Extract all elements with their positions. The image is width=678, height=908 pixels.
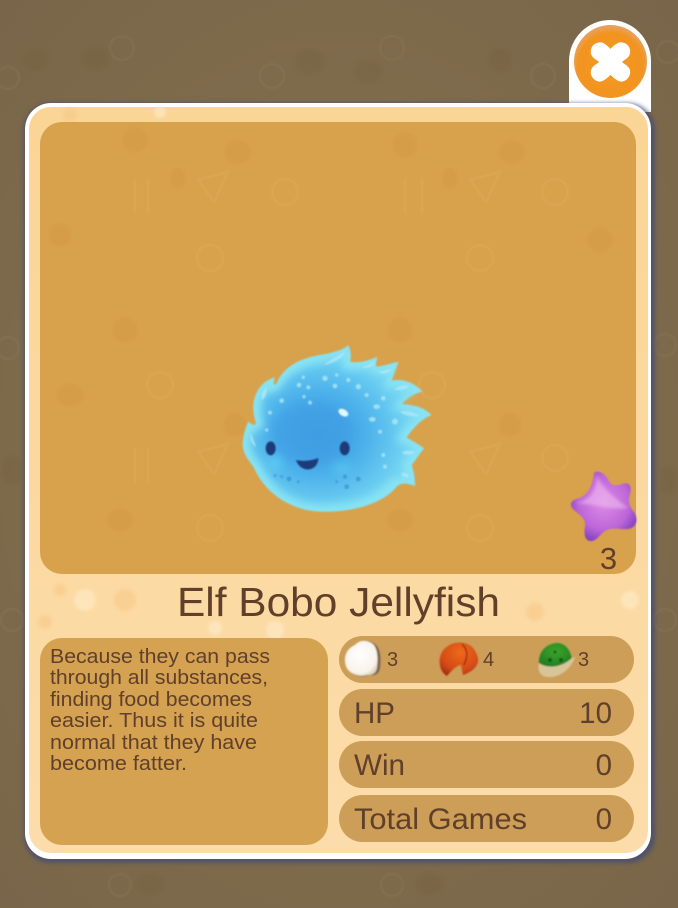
- resource count: turtle shell: 3: [578, 649, 589, 671]
- stat: HP: [339, 689, 634, 736]
- star count: 3: [600, 541, 617, 576]
- card panel: [24, 103, 655, 863]
- panel: description: [40, 638, 328, 845]
- resource count: shell: 3: [387, 649, 398, 671]
- creature: blue jellyfish blob: [243, 345, 432, 512]
- description text: become fatter.: [50, 752, 187, 775]
- description text: finding food becomes: [50, 688, 252, 711]
- close button tab: [569, 20, 651, 112]
- panel: resources row: [339, 636, 634, 683]
- icon: red shell: [440, 642, 478, 676]
- icon: green turtle shell: [538, 643, 575, 677]
- resource count: red shell: 4: [483, 649, 494, 671]
- stat: HP: HP: [354, 697, 395, 730]
- icon: white shell: [345, 641, 381, 676]
- description text: [50, 645, 270, 775]
- title: Elf Bobo Jellyfish: [177, 579, 500, 625]
- icon: purple star: [571, 472, 636, 541]
- description text: Because they can pass: [50, 645, 270, 668]
- creature display panel: [40, 122, 636, 574]
- stat: Total Games: 0: [596, 803, 612, 836]
- stat: Win: [339, 741, 634, 788]
- stat: Win: Win: [354, 749, 405, 782]
- description text: normal that they have: [50, 731, 257, 754]
- description text: easier. Thus it is quite: [50, 709, 258, 732]
- stat: Total Games: [339, 795, 634, 842]
- creature face: [266, 441, 350, 469]
- description text: through all substances,: [50, 666, 268, 689]
- stat: HP: 10: [579, 697, 612, 730]
- icon: close button: [574, 25, 647, 98]
- stat: Total Games: Total Games: [354, 803, 527, 836]
- stat: Win: 0: [596, 749, 612, 782]
